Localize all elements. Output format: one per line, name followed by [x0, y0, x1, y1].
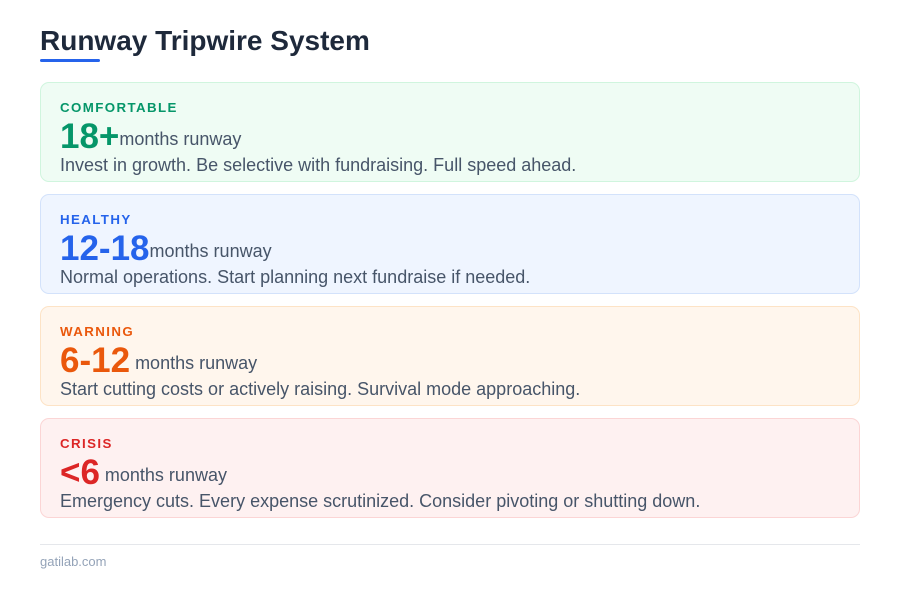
description: Normal operations. Start planning next fundraise if needed.	[60, 267, 530, 287]
label: crisis: CRISIS	[60, 436, 113, 451]
description: Invest in growth. Be selective with fundraising. Full speed ahead.	[60, 155, 576, 175]
title underline	[40, 59, 100, 62]
panel: comfortable	[40, 82, 860, 182]
footer source: gatilab.com	[40, 554, 106, 569]
label: warning: WARNING	[60, 324, 134, 339]
metric: 18+: 18+months runway	[60, 117, 241, 156]
metric: <6: <6 months runway	[60, 453, 227, 492]
description: Emergency cuts. Every expense scrutinized. Consider pivoting or shutting down.	[60, 491, 700, 511]
label: comfortable: COMFORTABLE	[60, 100, 178, 115]
metric: 6-12: 6-12 months runway	[60, 341, 257, 380]
panel: healthy	[40, 194, 860, 294]
panel: crisis	[40, 418, 860, 518]
label: healthy: HEALTHY	[60, 212, 132, 227]
metric: 12-18: 12-18months runway	[60, 229, 272, 268]
panel: warning	[40, 306, 860, 406]
title: Runway Tripwire System	[40, 25, 370, 56]
description: Start cutting costs or actively raising. Survival mode approaching.	[60, 379, 580, 399]
